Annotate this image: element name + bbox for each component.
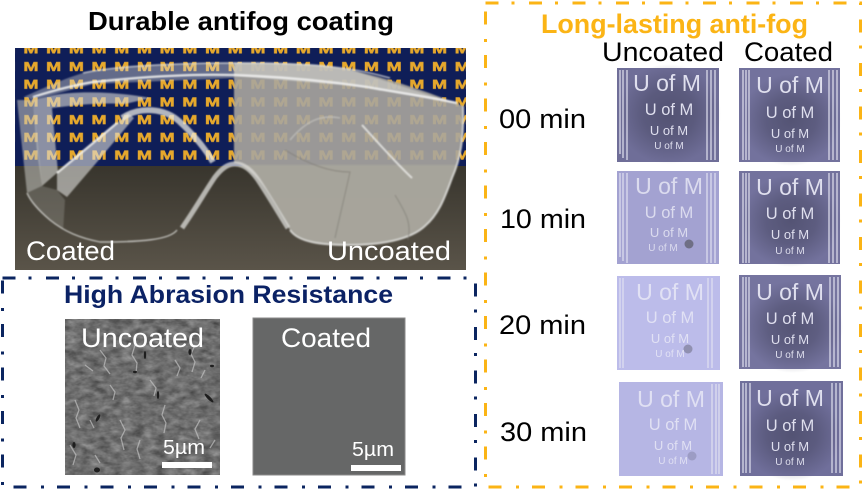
column label: uncoated: Uncoated bbox=[602, 37, 724, 67]
time label: 20 min: 20 min bbox=[499, 310, 586, 340]
chip: uncoated 30 min bbox=[619, 382, 723, 476]
chip: coated 00 min bbox=[739, 68, 841, 166]
scale label: 5µm bbox=[163, 437, 205, 459]
chip: uncoated 20 min: U of M bbox=[646, 309, 694, 327]
label: Uncoated bbox=[81, 323, 204, 353]
chip: uncoated 10 min: U of M bbox=[645, 204, 693, 222]
heading: Long-lasting anti-fog bbox=[541, 9, 808, 39]
chip: uncoated 10 min: U of M bbox=[650, 225, 688, 240]
chip: uncoated 20 min: U of M bbox=[651, 331, 689, 346]
chip: uncoated 20 min bbox=[617, 276, 720, 370]
label: Coated bbox=[281, 323, 371, 353]
SEM image: uncoated bbox=[65, 319, 220, 475]
time label: 30 min: 30 min bbox=[500, 417, 587, 447]
chip: uncoated 30 min: U of M bbox=[637, 386, 705, 412]
chip: uncoated 10 min: U of M bbox=[648, 243, 678, 254]
chip: coated 30 min: U of M bbox=[775, 457, 805, 468]
SEM image: coated bbox=[253, 318, 405, 475]
panel: goggles photo bbox=[15, 48, 466, 270]
chip: uncoated 30 min: U of M bbox=[658, 456, 688, 467]
chip: uncoated 30 min: U of M bbox=[649, 416, 697, 434]
time label: 00 min: 00 min bbox=[499, 104, 586, 134]
chip: coated 30 min: U of M bbox=[766, 417, 814, 435]
panel border bbox=[486, 3, 860, 487]
chip: coated 10 min: U of M bbox=[756, 174, 824, 200]
chip: uncoated 20 min: U of M bbox=[655, 349, 685, 360]
chip: coated 10 min: U of M bbox=[766, 205, 814, 223]
chip: uncoated 00 min: U of M bbox=[650, 123, 688, 138]
panel: high abrasion resistance bbox=[2, 278, 476, 487]
label: coated: Coated bbox=[26, 236, 115, 266]
chip: uncoated 10 min: U of M bbox=[635, 173, 703, 199]
chip: uncoated 30 min: U of M bbox=[654, 438, 692, 453]
chip: uncoated 20 min: U of M bbox=[636, 279, 704, 305]
chip: uncoated 00 min bbox=[617, 64, 721, 164]
chip: uncoated 10 min bbox=[617, 171, 719, 264]
chip: coated 20 min: U of M bbox=[771, 332, 809, 347]
heading: High Abrasion Resistance bbox=[64, 281, 393, 309]
chip: coated 30 min bbox=[740, 381, 843, 481]
photo background bbox=[15, 48, 466, 270]
scale label: 5µm bbox=[352, 439, 394, 461]
chip: coated 10 min: U of M bbox=[771, 227, 809, 242]
title: Durable antifog coating bbox=[88, 6, 394, 36]
chip: coated 10 min: U of M bbox=[775, 246, 805, 257]
chip: coated 30 min: U of M bbox=[771, 439, 809, 454]
icon: safety goggles bbox=[17, 60, 466, 250]
chip: coated 00 min: U of M bbox=[756, 72, 824, 98]
chip: coated 20 min: U of M bbox=[766, 310, 814, 328]
chip: coated 00 min: U of M bbox=[766, 104, 814, 122]
chip: uncoated 00 min: U of M bbox=[633, 70, 701, 96]
chip: coated 20 min: U of M bbox=[756, 279, 824, 305]
chip: coated 20 min bbox=[739, 275, 843, 373]
panel border bbox=[2, 278, 476, 487]
scale bar bbox=[351, 465, 401, 471]
chip: coated 30 min: U of M bbox=[756, 385, 824, 411]
chip: coated 00 min: U of M bbox=[775, 144, 805, 155]
time label: 10 min: 10 min bbox=[500, 204, 586, 234]
chip: coated 20 min: U of M bbox=[775, 350, 805, 361]
chip: uncoated 00 min: U of M bbox=[645, 101, 693, 119]
scale bar bbox=[162, 462, 212, 468]
column label: coated: Coated bbox=[744, 37, 833, 67]
label: uncoated: Uncoated bbox=[327, 236, 451, 266]
chip: coated 10 min bbox=[739, 171, 841, 267]
panel: long-lasting anti-fog bbox=[486, 3, 860, 487]
chip: coated 00 min: U of M bbox=[771, 126, 809, 141]
chip: uncoated 00 min: U of M bbox=[654, 141, 684, 152]
